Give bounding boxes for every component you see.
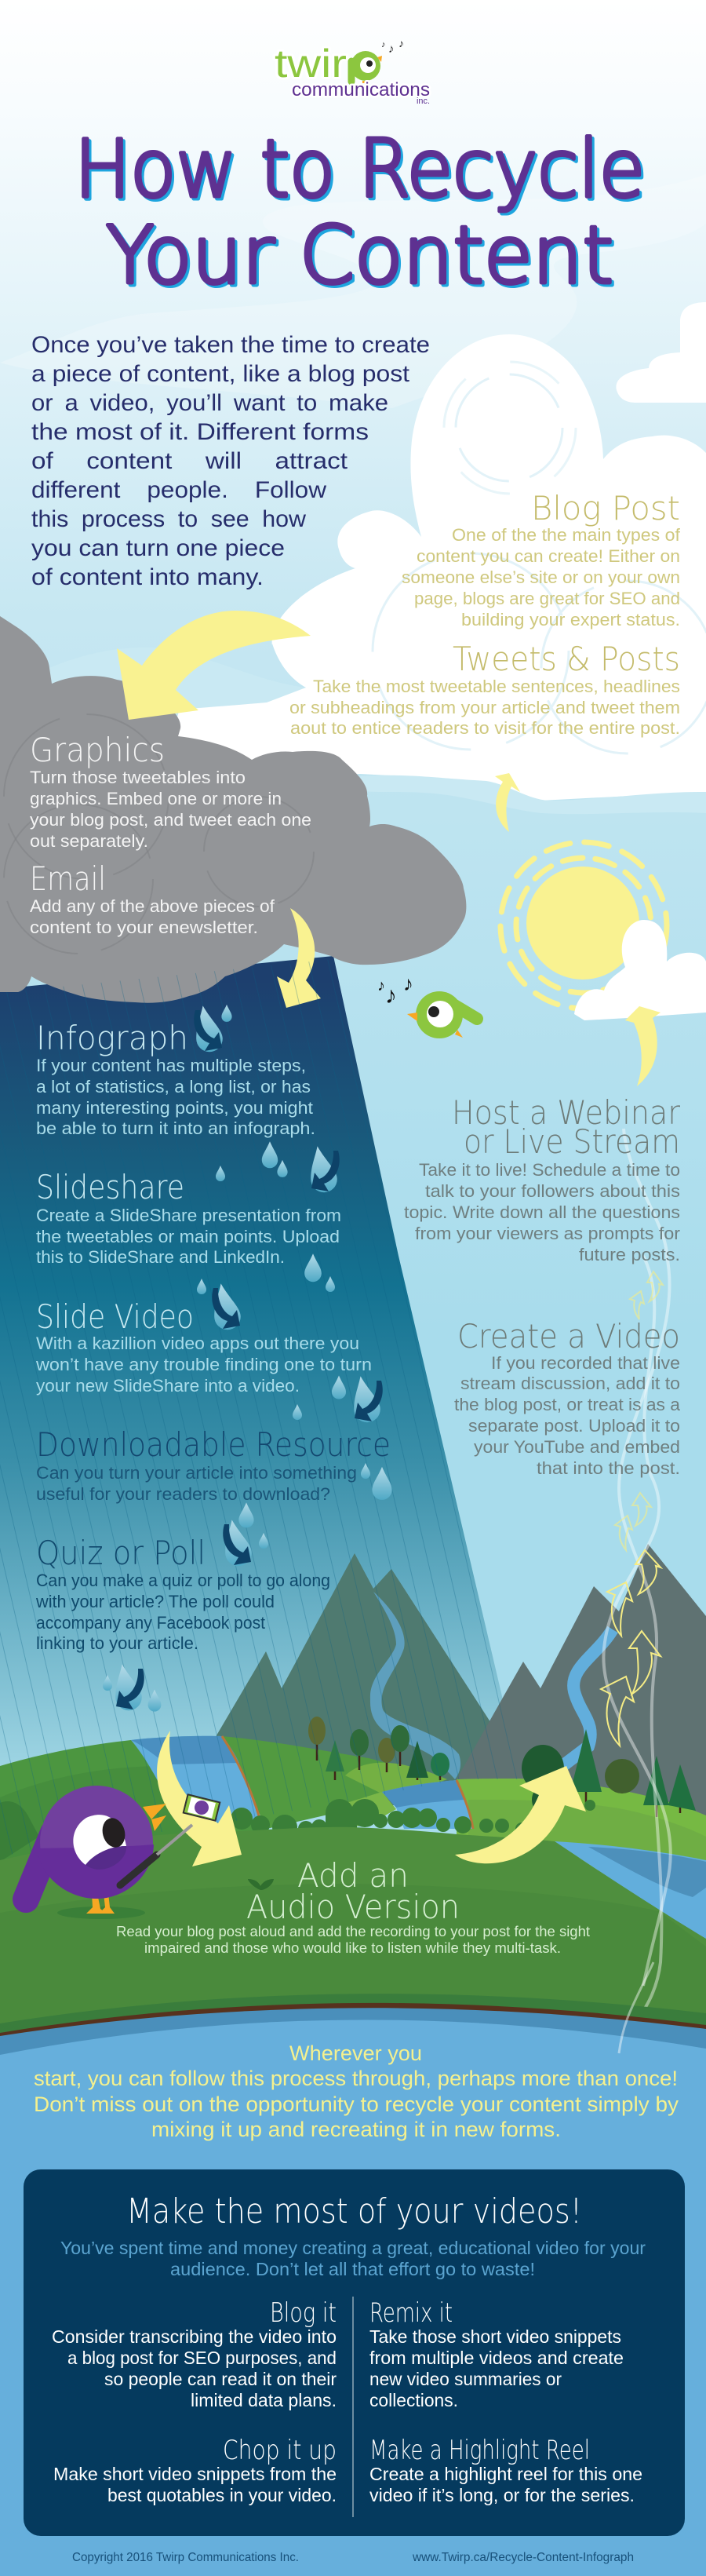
arrow: up to white cloud <box>495 773 520 832</box>
item: remix it: Take those short video snippets <box>369 2326 621 2347</box>
text: blog post: One of the the main types of <box>452 525 681 545</box>
rain lines over scene <box>0 959 522 1856</box>
music notes: ♪ <box>377 977 385 994</box>
panel intro <box>60 2238 646 2279</box>
item: remix it <box>369 2297 624 2410</box>
music notes: ♪ <box>385 983 397 1009</box>
arrow: white cloud to grey cloud <box>117 611 311 720</box>
waterfall edge <box>222 1736 260 1821</box>
rain drops <box>103 1005 392 1712</box>
icon: leaves <box>248 1879 274 1890</box>
text: host a webinar: from your viewers as prompts for <box>415 1224 680 1243</box>
heading: graphics: Graphics <box>30 731 165 769</box>
heading: add an audio version <box>246 1856 460 1926</box>
right mountain river <box>562 1629 613 1766</box>
text: quiz or poll <box>35 1571 330 1653</box>
text: email: content to your enewsletter. <box>30 918 258 937</box>
text: host a webinar: talk to your followers about this <box>425 1181 680 1201</box>
section: tweets and posts <box>289 640 680 738</box>
music notes: ♪ <box>398 37 404 49</box>
text: host a webinar: future posts. <box>579 1245 680 1264</box>
text: create a video <box>454 1353 681 1478</box>
title: How to Recycle <box>75 122 645 215</box>
text: blog post: someone else’s site or on your own <box>402 567 680 587</box>
intro paragraph: a piece of content, like a blog post <box>31 361 410 387</box>
text: slideshare <box>36 1206 341 1267</box>
heading: slide video: Slide Video <box>36 1297 194 1336</box>
text: add an audio version <box>116 1924 590 1956</box>
right hill <box>457 1779 706 1864</box>
item: chop it up <box>53 2435 337 2505</box>
item: remix it: new video summaries or <box>369 2369 562 2389</box>
music notes <box>381 37 404 56</box>
text: quiz or poll: linking to your article. <box>36 1633 198 1653</box>
text: add an audio version: impaired and those who would like to listen while they multi-task. <box>144 1940 561 1956</box>
text: quiz or poll: with your article? The poll could <box>35 1592 275 1611</box>
heading: infograph: Infograph <box>36 1019 188 1057</box>
intro paragraph: you can turn one piece <box>31 535 285 561</box>
sky background <box>0 0 706 2056</box>
item: make a highlight reel: video if it’s long, or for the series. <box>369 2485 635 2505</box>
text: slide video: won’t have any trouble finding one to turn <box>35 1355 372 1374</box>
title: How to Recycle <box>77 125 647 217</box>
section: create a video <box>454 1317 681 1478</box>
intro paragraph: this process to see how <box>31 506 306 532</box>
logo bird <box>351 51 382 83</box>
item: chop it up: Make short video snippets from the <box>53 2464 337 2484</box>
footer <box>72 2551 634 2564</box>
item: make a highlight reel <box>369 2435 642 2505</box>
heading: downloadable resource: Downloadable Resource <box>36 1425 391 1464</box>
text: infograph: be able to turn it into an infograph. <box>36 1118 315 1138</box>
text: email <box>30 896 275 937</box>
item: chop it up: Chop it up <box>223 2435 337 2466</box>
text: downloadable resource <box>36 1463 357 1504</box>
eye <box>73 1815 126 1865</box>
section: add an audio version <box>116 1856 590 1956</box>
text: tweets and posts: aout to entice readers to visit for the entire post. <box>290 718 680 738</box>
text: slideshare: the tweetables or main points. Upload <box>36 1227 340 1246</box>
phone <box>184 1794 220 1821</box>
lower right river <box>555 1841 706 1943</box>
item: blog it: limited data plans. <box>191 2390 337 2410</box>
text: create a video: stream discussion, add it to <box>460 1374 680 1393</box>
beak <box>143 1804 166 1831</box>
light green patch <box>337 1792 396 1829</box>
heading: make the most: Make the most of your videos! <box>126 2191 582 2231</box>
title: Your Content <box>106 209 613 301</box>
text: blog post: building your expert status. <box>461 610 680 629</box>
section: email <box>30 859 275 937</box>
text: graphics <box>30 768 311 851</box>
section: infograph <box>36 1019 315 1138</box>
text: slideshare: this to SlideShare and LinkedIn. <box>36 1247 285 1267</box>
text: email: Add any of the above pieces of <box>30 896 275 916</box>
heading: slideshare: Slideshare <box>36 1168 184 1206</box>
ground edge and bottom background <box>0 1994 706 2576</box>
intro paragraph: or a video, you’ll want to make <box>31 390 388 416</box>
trees <box>308 1717 696 1817</box>
text: tweets and posts: Take the most tweetable sentences, headlines <box>313 677 680 696</box>
arrow: up to small cloud <box>625 1006 661 1086</box>
item: remix it: from multiple videos and create <box>369 2348 624 2368</box>
waterfall <box>131 1736 260 1825</box>
footer: www.Twirp.ca/Recycle-Content-Infograph <box>412 2551 634 2564</box>
closing message <box>34 2041 679 2141</box>
text: create a video: that into the post. <box>537 1458 680 1478</box>
panel intro: You’ve spent time and money creating a great, educational video for your <box>60 2238 646 2258</box>
text: downloadable resource: useful for your readers to download? <box>36 1484 330 1504</box>
small white cloud <box>574 920 706 1020</box>
text: infograph <box>36 1056 315 1138</box>
text: tweets and posts: or subheadings from your article and tweet them <box>289 698 680 717</box>
intro paragraph: Once you’ve taken the time to create <box>31 332 430 358</box>
intro paragraph <box>31 332 430 590</box>
selfie stick <box>120 1855 157 1885</box>
arrow: audio hill to mountains <box>455 1766 586 1863</box>
text: infograph: a lot of statistics, a long list, or has <box>36 1077 311 1096</box>
item: blog it: Consider transcribing the video into <box>52 2326 337 2347</box>
closing message: start, you can follow this process through, perhaps more than once! <box>34 2067 678 2090</box>
back left hill <box>0 1740 267 1864</box>
music notes: ♪ <box>388 42 394 56</box>
heading: tweets and posts: Tweets & Posts <box>453 640 680 678</box>
ribbons of wind <box>603 1129 671 2055</box>
body <box>40 1786 153 1899</box>
left mountain river <box>370 1592 460 1779</box>
item: make a highlight reel: Create a highlight reel for this one <box>369 2464 642 2484</box>
hills and water <box>0 1736 706 2056</box>
intro paragraph: different people. Follow <box>31 477 326 503</box>
item: chop it up: best quotables in your video. <box>107 2485 337 2505</box>
text: graphics: out separately. <box>30 831 148 851</box>
feet <box>86 1893 115 1914</box>
intro paragraph: the most of it. Different forms <box>31 419 369 445</box>
music notes: ♪ <box>403 972 413 995</box>
sky wisps <box>0 174 706 408</box>
logo inc: inc. <box>417 97 430 106</box>
dark arrows inside drops <box>116 1010 383 1709</box>
text: host a webinar: topic. Write down all the questions <box>404 1202 680 1222</box>
text: create a video: separate post. Upload it to <box>468 1416 680 1436</box>
text: slide video: your new SlideShare into a video. <box>36 1376 300 1396</box>
arrow: down to audio hill <box>157 1731 242 1866</box>
item: blog it: a blog post for SEO purposes, and <box>67 2348 337 2368</box>
section: slide video <box>35 1297 372 1396</box>
text: blog post <box>402 525 681 629</box>
text: tweets and posts <box>289 677 680 738</box>
text: downloadable resource: Can you turn your article into something <box>36 1463 357 1483</box>
item: blog it <box>52 2297 337 2410</box>
item: make a highlight reel: Make a Highlight Reel <box>369 2435 590 2466</box>
logo word twirp: twir <box>275 42 347 86</box>
heading: quiz or poll: Quiz or Poll <box>36 1534 206 1572</box>
logo <box>275 37 430 106</box>
text: quiz or poll: Can you make a quiz or poll to go along <box>36 1571 330 1590</box>
panel: make the most of your videos <box>24 2169 685 2536</box>
heading: host a webinar: Host a Webinar <box>452 1093 681 1132</box>
panel intro: audience. Don’t let all that effort go to waste! <box>170 2259 535 2279</box>
closing message: Don’t miss out on the opportunity to recycle your content simply by <box>34 2093 679 2116</box>
light band behind big arrow <box>49 648 306 710</box>
text: quiz or poll: accompany any Facebook post <box>36 1613 265 1633</box>
intro paragraph: of content into many. <box>31 564 264 590</box>
rain beam <box>0 956 522 1805</box>
heading: create a video: Create a Video <box>457 1317 680 1356</box>
section: quiz or poll <box>35 1534 330 1653</box>
section: slideshare <box>36 1168 341 1267</box>
intro paragraph: of content will attract <box>31 448 348 474</box>
left mountains <box>217 1553 502 1805</box>
right mountains <box>457 1544 706 1829</box>
section: host a webinar <box>404 1093 681 1264</box>
title <box>75 122 647 304</box>
heading: host a webinar: or Live Stream <box>464 1122 680 1161</box>
white cloud <box>157 302 706 814</box>
second water <box>382 1780 473 1829</box>
text: graphics: Turn those tweetables into <box>30 768 246 787</box>
text: slide video <box>35 1334 372 1396</box>
text: host a webinar: Take it to live! Schedule a time to <box>419 1160 680 1180</box>
sun <box>500 842 667 1009</box>
heading: email: Email <box>30 859 106 898</box>
arrow: grey cloud to rain <box>277 908 321 1008</box>
outlined yellow arrows <box>601 1272 663 1746</box>
text: infograph: If your content has multiple steps, <box>36 1056 306 1075</box>
section: blog post <box>402 489 681 629</box>
text: add an audio version: Read your blog post aloud and add the recording to your post for the sight <box>116 1924 590 1939</box>
bushes <box>0 1799 528 1862</box>
item: blog it: so people can read it on their <box>104 2369 337 2389</box>
text: slide video: With a kazillion video apps out there you <box>36 1334 359 1353</box>
heading: add an audio version: Add an <box>297 1856 409 1895</box>
text: slideshare: Create a SlideShare presentation from <box>36 1206 341 1225</box>
item: remix it: Remix it <box>369 2297 453 2329</box>
music notes: ♪ <box>381 40 386 49</box>
item: blog it: Blog it <box>270 2297 337 2329</box>
tail <box>26 1833 53 1899</box>
heading: host a webinar <box>452 1093 681 1161</box>
green bird <box>407 991 477 1038</box>
section: graphics <box>30 731 311 851</box>
faint recycle arrows in white cloud <box>373 362 706 753</box>
text: create a video: If you recorded that live <box>491 1353 680 1373</box>
text: host a webinar <box>404 1160 680 1264</box>
text: blog post: page, blogs are great for SEO and <box>414 589 680 608</box>
bird shadow <box>57 1906 145 1919</box>
front hill <box>0 1827 706 2056</box>
title: Your Content <box>108 211 616 304</box>
item: remix it: collections. <box>369 2390 458 2410</box>
text: create a video: the blog post, or treat is as a <box>454 1395 681 1414</box>
music notes <box>377 972 413 1009</box>
closing message: Wherever you <box>289 2041 422 2065</box>
grey storm cloud <box>0 616 466 1003</box>
purple bird with selfie stick <box>26 1786 220 1919</box>
text: graphics: graphics. Embed one or more in <box>30 789 282 808</box>
text: infograph: many interesting points, you might <box>36 1098 313 1118</box>
heading: blog post: Blog Post <box>531 489 680 527</box>
section: downloadable resource <box>36 1425 391 1504</box>
heading: add an audio version: Audio Version <box>246 1888 460 1926</box>
closing message: mixing it up and recreating it in new forms. <box>151 2118 561 2141</box>
text: graphics: your blog post, and tweet each one <box>30 810 311 830</box>
text: blog post: content you can create! Either on <box>417 546 680 566</box>
back centre hill <box>222 1736 447 1829</box>
text: create a video: your YouTube and embed <box>474 1437 680 1457</box>
ribbon tail <box>619 1962 653 2053</box>
logo word communications: communications <box>292 79 430 100</box>
footer: Copyright 2016 Twirp Communications Inc. <box>72 2551 299 2564</box>
